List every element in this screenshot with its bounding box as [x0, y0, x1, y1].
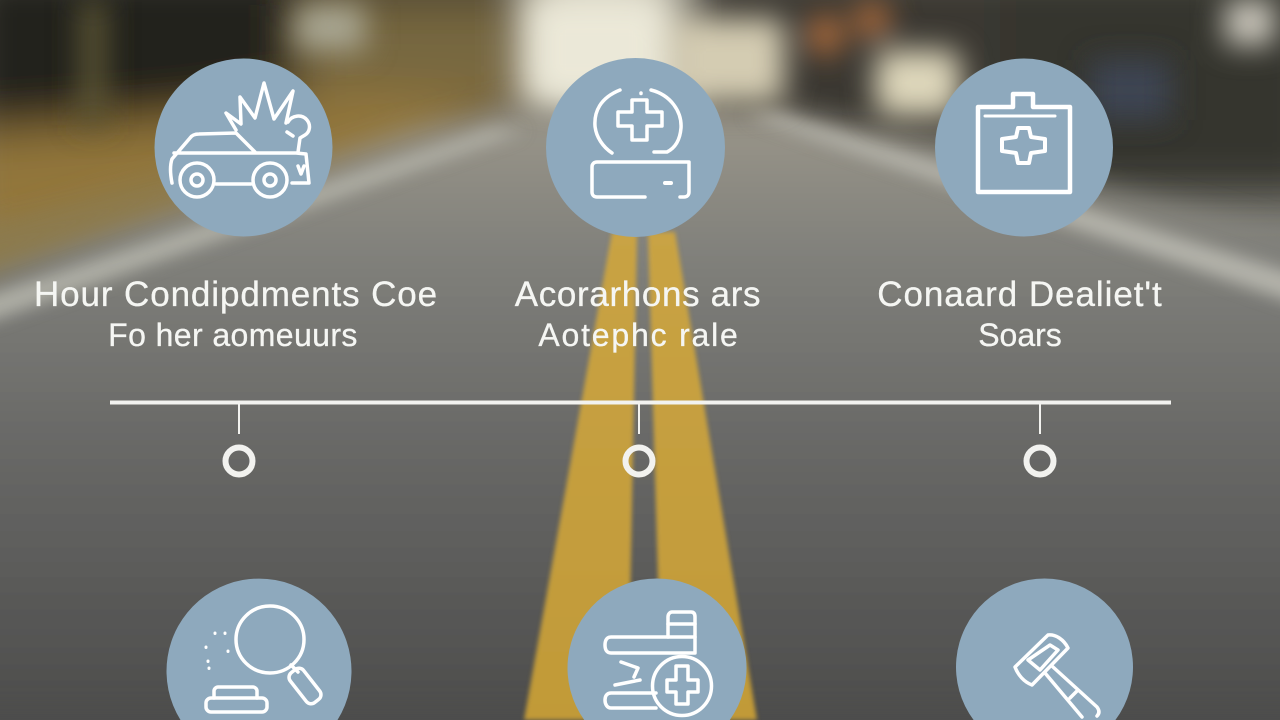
label: column 2	[514, 275, 761, 353]
icon circle: magnifying glass	[167, 579, 352, 720]
label: column 3: Soars	[978, 317, 1062, 353]
icon circle: first aid card	[935, 58, 1113, 236]
yellow centre lines	[524, 232, 757, 720]
label: column 1: Hour Condipdments Coe	[34, 275, 438, 314]
label: column 1	[34, 275, 438, 353]
icon circle: vehicle and medical plus	[567, 578, 746, 720]
icon circle: medical plus and stretcher	[546, 58, 725, 237]
label: column 2: Acorarhons ars	[515, 275, 761, 314]
timeline with three markers	[110, 402, 1171, 474]
label: column 3: Conaard Dealiet't	[877, 275, 1163, 314]
label: column 3	[877, 275, 1163, 353]
icon circle: car crash	[154, 58, 332, 236]
label: column 1: Fo her aomeuurs	[108, 317, 358, 353]
icon circle: gavel hammer	[956, 579, 1133, 720]
label: column 2: Aotephc rale	[538, 317, 740, 353]
